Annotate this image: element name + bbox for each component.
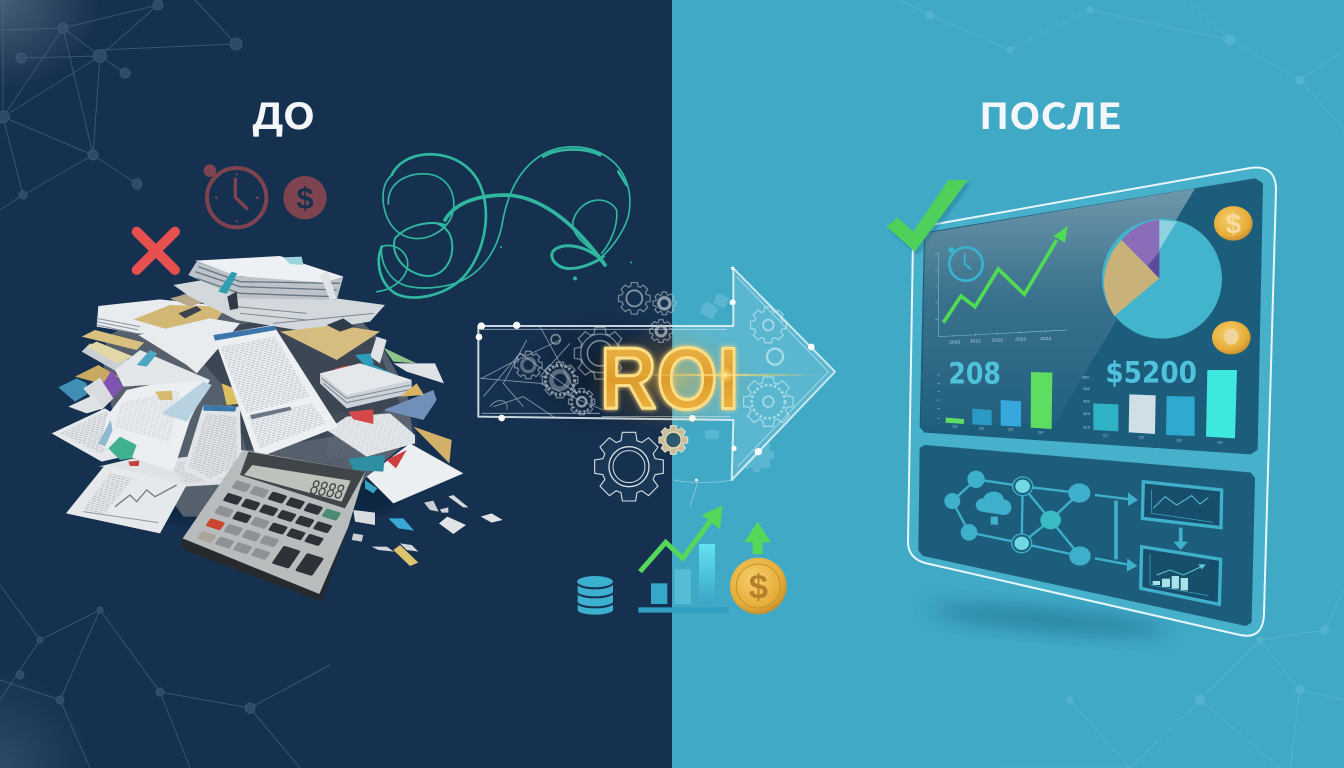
bars right: $40 — [1083, 386, 1091, 391]
icon: dollar coin — [283, 176, 327, 219]
panel body — [919, 446, 1254, 625]
icon: database — [576, 575, 614, 616]
bars left: Q4 — [1038, 429, 1044, 434]
before illustration: icons and paper pile — [52, 164, 503, 602]
icon: gold coin — [730, 558, 787, 614]
flow arrows — [1095, 492, 1188, 572]
left colored scraps — [58, 365, 123, 413]
dark halo behind ROI — [537, 327, 650, 417]
network nodes — [944, 471, 1091, 566]
envelope and right scraps — [348, 427, 503, 566]
top stack — [173, 256, 385, 332]
lower middle stack — [138, 318, 240, 373]
pie chart — [1102, 219, 1222, 339]
icon: stopwatch — [204, 164, 266, 227]
bars left: Q2 — [979, 425, 985, 430]
bottom growth icons — [576, 506, 787, 616]
coin: dollar — [1214, 206, 1253, 241]
line chart: 2023 — [1015, 337, 1026, 343]
background network: left side — [0, 0, 330, 768]
large gear outline — [595, 432, 663, 501]
ROI process arrow — [476, 267, 835, 507]
bars left: Q1 — [952, 424, 958, 429]
line chart: 2020 — [949, 339, 960, 345]
paper pile — [52, 256, 503, 602]
dashboard lower panel: data flow — [919, 446, 1254, 625]
panel: before background — [0, 0, 672, 768]
bars right: $50 — [1082, 374, 1090, 379]
bars right: Q2 — [1139, 434, 1145, 439]
coin: dollar: $ — [1226, 208, 1241, 239]
bars right: Q3 — [1176, 437, 1182, 442]
ROI label: ROI — [600, 330, 739, 428]
pile base mass — [103, 290, 413, 517]
left stack — [82, 292, 227, 373]
chart sheet — [66, 465, 187, 533]
calculator keys — [196, 480, 353, 576]
arrow nodes — [476, 267, 815, 481]
right folder — [280, 318, 444, 383]
bars right: Q4 — [1217, 439, 1223, 444]
circuit lines — [480, 327, 732, 507]
network links — [952, 479, 1080, 556]
line chart: 2021 — [970, 339, 981, 345]
invoice sheet — [213, 325, 338, 458]
scribble arrow — [377, 147, 632, 298]
icon: cloud — [976, 492, 1011, 525]
right stack — [320, 363, 437, 457]
screen: lower chart — [1141, 547, 1221, 604]
bars right: $10 — [1083, 424, 1091, 429]
arrow outline — [478, 268, 835, 480]
icon: stopwatch — [948, 247, 983, 281]
arrow inner line — [482, 277, 828, 467]
line chart: 2022 — [992, 338, 1003, 344]
icon: dollar coin: $ — [296, 182, 314, 216]
small gold gear — [659, 426, 688, 454]
number: $5200: $5200 — [1105, 356, 1197, 390]
check mark — [887, 180, 968, 252]
dashboard top panel — [887, 179, 1262, 453]
calculator: 8888 — [307, 476, 347, 504]
icon: red cross — [137, 232, 175, 270]
dark gaps — [180, 317, 400, 450]
gears: left side — [515, 283, 676, 415]
check mark shadow — [889, 184, 971, 256]
glass reflection — [922, 188, 1195, 426]
lower filler sheets — [98, 450, 243, 487]
calculator — [180, 450, 365, 602]
left sheets — [52, 350, 244, 483]
pile shadow — [120, 467, 400, 527]
lens flare — [625, 366, 825, 384]
icon: gold coin: $ — [749, 568, 768, 606]
screen: upper chart — [1142, 482, 1222, 528]
gears: right side — [744, 307, 793, 426]
ROI glow — [583, 325, 757, 432]
arrow translucent shapes — [673, 270, 833, 480]
bar chart — [638, 544, 728, 613]
line chart: 2024 — [1040, 336, 1051, 342]
bars left — [937, 372, 1052, 434]
corner glow bottom-left — [0, 670, 90, 768]
icon: up arrow — [744, 522, 771, 554]
bars right — [1082, 370, 1237, 444]
dashboard frame — [908, 167, 1276, 636]
growth arrow — [640, 506, 722, 572]
coin: lower — [1212, 321, 1251, 354]
bars right: Q1 — [1103, 433, 1109, 438]
panel shadow — [930, 601, 1170, 639]
bars left: Q3 — [1008, 427, 1014, 432]
background network: right side — [900, 0, 1344, 768]
bars right: $30 — [1083, 399, 1091, 404]
bars right: $20 — [1083, 411, 1091, 416]
line chart — [935, 226, 1068, 345]
heading: after: ПОСЛЕ — [979, 88, 1122, 140]
panel body — [921, 179, 1262, 453]
panel: after background — [672, 0, 1344, 768]
corner glow top-left — [0, 0, 100, 90]
heading: before: ДО — [252, 88, 315, 140]
number: 208: 208 — [948, 356, 1001, 390]
